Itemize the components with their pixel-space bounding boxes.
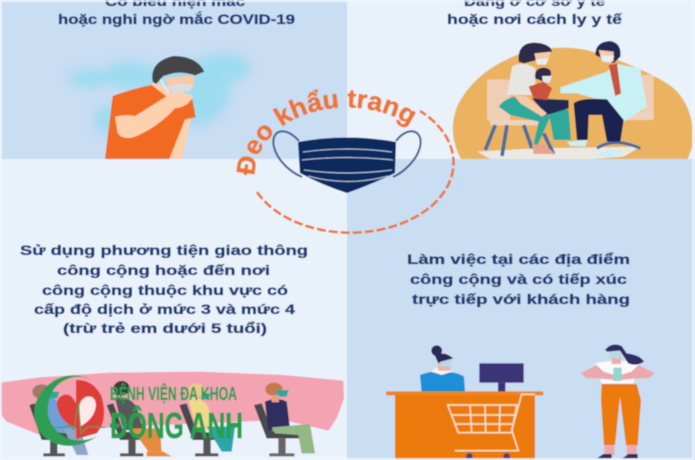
text: public transport caption: Sử dụng phương tiện giao thông [20, 243, 308, 258]
logo text: Đông Anh: ĐÔNG ANH [110, 404, 243, 446]
heading: wear a mask: Đeo khẩu trang [236, 88, 416, 176]
logo mark: crescent and heart [34, 375, 105, 446]
text: public transport caption: (trừ trẻ em dưới 5 tuổi) [63, 321, 267, 336]
illustration: seated passengers on pink brush stroke [0, 372, 344, 456]
passenger 3 [179, 383, 235, 456]
shopping cart [448, 394, 535, 451]
dashed ring [257, 111, 454, 233]
mask body [298, 138, 396, 193]
text: symptoms caption: hoặc nghi ngờ mắc COVID-19 [58, 12, 295, 27]
counter [386, 391, 543, 460]
panel: public workplaces [347, 159, 695, 460]
passenger 2 [107, 381, 172, 456]
text: public transport caption: cấp độ dịch ở mức 3 và mức 4 [34, 302, 296, 317]
text: medical facility caption [447, 0, 623, 27]
text: public transport caption: công cộng hoặc đến nơi [57, 263, 270, 278]
text: public transport caption: công cộng thuộc khu vực có [42, 283, 288, 298]
logo text: hospital name: BỆNH VIỆN ĐA KHOA [110, 383, 237, 404]
mask pleats [302, 149, 393, 182]
illustration: coughing man [68, 53, 250, 159]
icon: face mask badge [236, 88, 456, 235]
logo: Đông Anh hospital [34, 375, 243, 446]
panel: medical facility [347, 0, 695, 159]
illustration: cashier counter and customer [386, 345, 655, 460]
monitor [479, 363, 524, 392]
panel: public transport [0, 159, 347, 460]
illustration: doctor examining child [453, 41, 694, 159]
text: public workplaces caption [407, 252, 630, 307]
text: public transport caption [20, 243, 308, 336]
passenger 1 [29, 384, 88, 456]
mask ear loops [273, 131, 421, 177]
customer [581, 345, 655, 459]
panel: symptoms [0, 0, 347, 159]
passenger 4 [254, 383, 315, 456]
text: public workplaces caption: Làm việc tại các địa điểm [407, 252, 630, 267]
text: public workplaces caption: công cộng và có tiếp xúc [410, 272, 628, 287]
cashier [420, 345, 465, 392]
text: public workplaces caption: trực tiếp với khách hàng [412, 292, 630, 307]
text: symptoms caption [58, 0, 295, 27]
text: medical facility caption: hoặc nơi cách ly y tế [447, 12, 623, 27]
